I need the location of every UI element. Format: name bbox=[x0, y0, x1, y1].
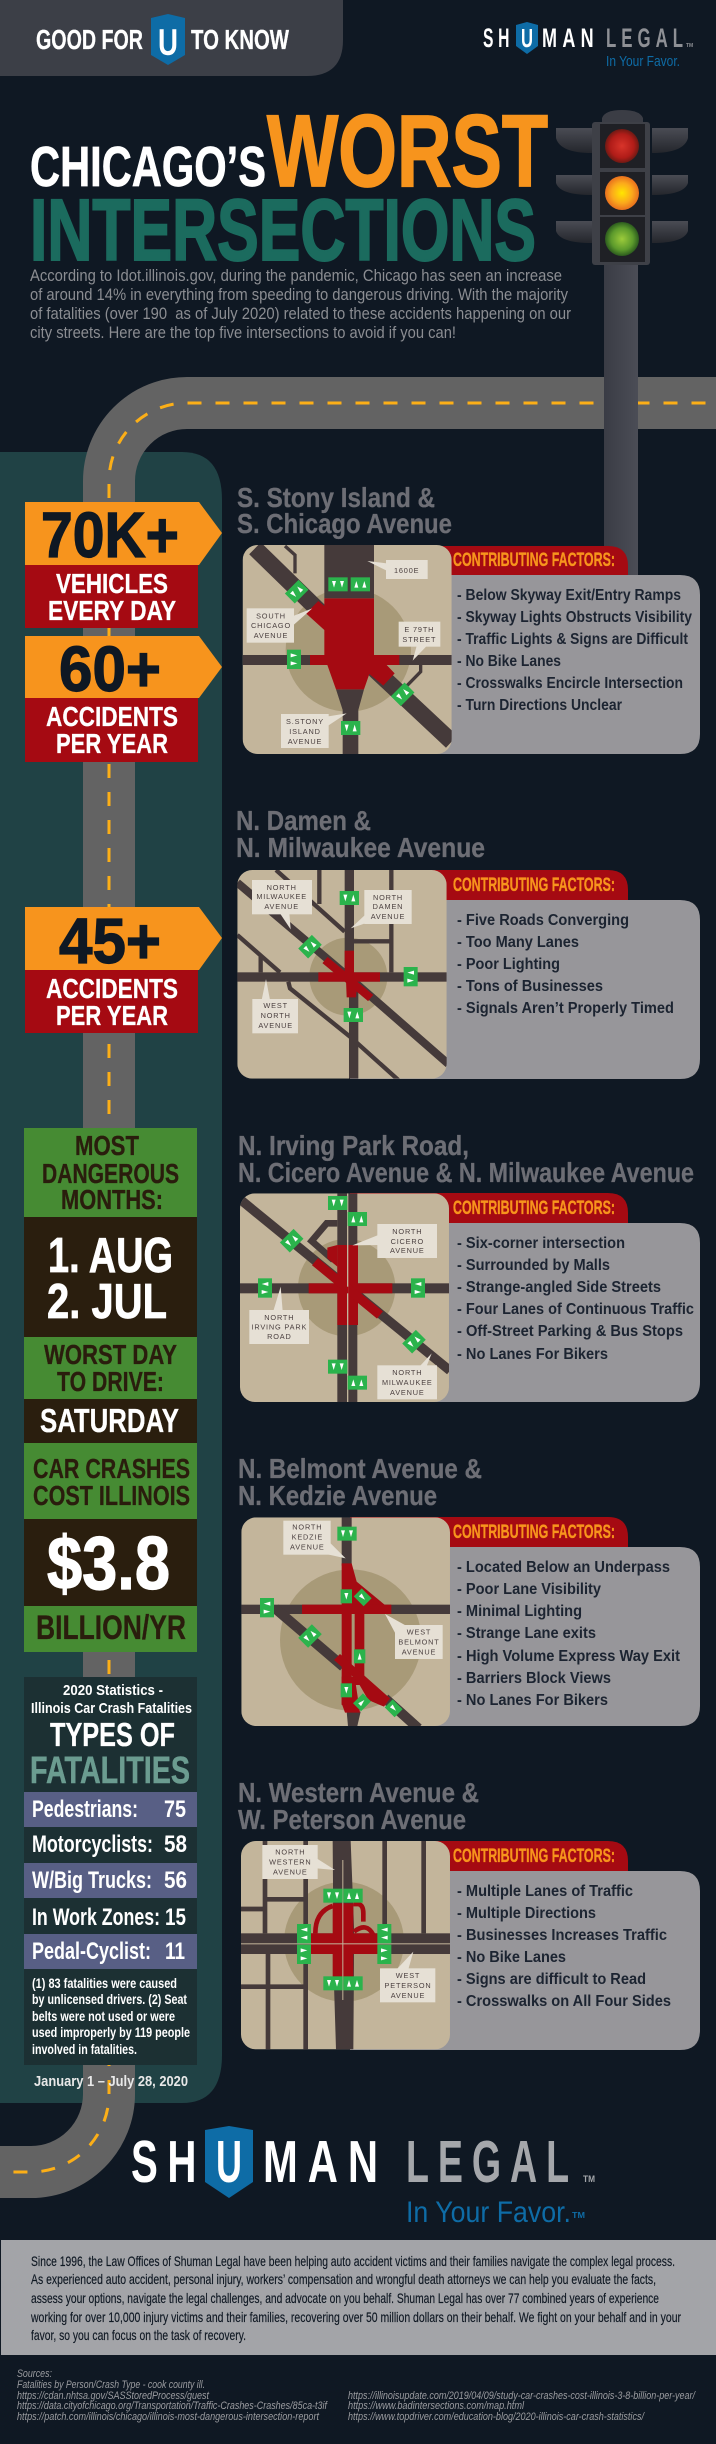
intersection 2: N. Damen & bbox=[236, 805, 371, 836]
map: Irving Park, Cicero and Milwaukee: IRVING PARK bbox=[251, 1323, 307, 1332]
types of fatalities table: 11 bbox=[165, 1938, 185, 1965]
map: Stony Island and Chicago: STREET bbox=[402, 635, 436, 644]
intersection 2: CONTRIBUTING FACTORS: bbox=[453, 875, 615, 896]
intersection 1: - No Bike Lanes bbox=[457, 653, 561, 670]
map: Stony Island and Chicago: E 79TH bbox=[404, 625, 434, 634]
sources: Fatalities by Person/Crash Type - cook county ill. bbox=[17, 2379, 205, 2391]
logo: Shuman Legal top: U bbox=[521, 23, 533, 53]
title bbox=[30, 94, 548, 279]
road bbox=[0, 403, 716, 2172]
map: Belmont and Kedzie: AVENUE bbox=[402, 1648, 436, 1657]
intersection 4: - High Volume Express Way Exit bbox=[457, 1648, 680, 1665]
map: Western and Peterson bbox=[241, 1841, 450, 2049]
logo: Shuman Legal top: TM bbox=[686, 43, 693, 49]
header tab: good for U to know: TO KNOW bbox=[191, 24, 289, 55]
map: Damen and Milwaukee: NORTH bbox=[373, 893, 403, 902]
intersection 1: CONTRIBUTING FACTORS: bbox=[453, 550, 615, 571]
logo: Shuman Legal footer bbox=[131, 2126, 595, 2229]
map: Irving Park, Cicero and Milwaukee: ROAD bbox=[267, 1332, 292, 1341]
intersection 5: CONTRIBUTING FACTORS: bbox=[453, 1846, 615, 1867]
intersection 4: - Barriers Block Views bbox=[457, 1670, 611, 1687]
about text block: favor, so you can focus on the task of recovery. bbox=[31, 2327, 246, 2343]
stat stack: most dangerous months: 2. JUL bbox=[47, 1275, 167, 1329]
intersection 4: - Minimal Lighting bbox=[457, 1603, 582, 1620]
intersection 4: - Located Below an Underpass bbox=[457, 1559, 670, 1576]
types of fatalities table: 56 bbox=[164, 1867, 187, 1894]
stat sign: 45+ accidents per year: 45+ bbox=[59, 905, 161, 977]
intersection 4 bbox=[238, 1453, 700, 1728]
stat stack: worst day to drive: WORST DAY bbox=[44, 1339, 177, 1370]
stat sign: 45+ accidents per year bbox=[25, 905, 222, 1033]
intersection 1: - Turn Directions Unclear bbox=[457, 697, 622, 714]
intersection 4: - Strange Lane exits bbox=[457, 1625, 596, 1642]
map: Damen and Milwaukee: AVENUE bbox=[258, 1021, 293, 1030]
intro text: of fatalities (over 190 as of July 2020) related to these accidents happening on our bbox=[30, 305, 571, 323]
map: Western and Peterson: AVENUE bbox=[273, 1868, 308, 1877]
logo: Shuman Legal top: SH bbox=[483, 23, 514, 53]
stat sign: 45+ accidents per year: PER YEAR bbox=[56, 1000, 168, 1031]
intersection 5: N. Western Avenue & bbox=[238, 1777, 479, 1808]
map: Stony Island and Chicago: AVENUE bbox=[254, 631, 288, 640]
map: Irving Park, Cicero and Milwaukee bbox=[240, 1193, 450, 1402]
teal side panel bbox=[0, 452, 222, 2103]
map: Western and Peterson: AVENUE bbox=[391, 1991, 425, 2000]
stat sign: 70K+ vehicles every day bbox=[25, 499, 222, 628]
types of fatalities table: Pedal-Cyclist: bbox=[32, 1938, 151, 1965]
map: Damen and Milwaukee: AVENUE bbox=[264, 902, 299, 911]
intersection 5 bbox=[238, 1777, 700, 2050]
logo: Shuman Legal footer: MAN bbox=[263, 2129, 388, 2195]
date range: January 1 – July 28, 2020 bbox=[34, 2073, 188, 2090]
stat sign: 70K+ vehicles every day: EVERY DAY bbox=[48, 595, 176, 626]
title: INTERSECTIONS bbox=[30, 182, 536, 279]
map: Western and Peterson: NORTH bbox=[275, 1848, 305, 1857]
about text block bbox=[1, 2240, 716, 2355]
types of fatalities table: 2020 Statistics - bbox=[63, 1682, 163, 1699]
logo: Shuman Legal footer: U bbox=[216, 2129, 242, 2195]
intersection 1: S. Stony Island & bbox=[237, 482, 435, 513]
map: Irving Park, Cicero and Milwaukee: AVENUE bbox=[390, 1388, 425, 1397]
intersection 5: - Businesses Increases Traffic bbox=[457, 1927, 667, 1944]
intersection 1: - Traffic Lights & Signs are Difficult bbox=[457, 631, 688, 648]
stat stack: cost of crashes: BILLION/YR bbox=[36, 1609, 186, 1647]
intersection 3: N. Irving Park Road, bbox=[238, 1130, 469, 1161]
intro text: city streets. Here are the top five intersections to avoid if you can! bbox=[30, 324, 456, 342]
title: CHICAGO’S bbox=[30, 135, 266, 199]
map: Stony Island and Chicago: ISLAND bbox=[289, 727, 321, 736]
intersection 2: - Poor Lighting bbox=[457, 956, 560, 973]
intersection 3: - Off-Street Parking & Bus Stops bbox=[457, 1323, 683, 1340]
stat stack: cost of crashes: COST ILLINOIS bbox=[33, 1480, 190, 1511]
map: Damen and Milwaukee: DAMEN bbox=[373, 902, 403, 911]
map: Belmont and Kedzie: AVENUE bbox=[290, 1543, 325, 1552]
intersection 2: N. Milwaukee Avenue bbox=[236, 832, 485, 863]
intersection 5: - No Bike Lanes bbox=[457, 1949, 566, 1966]
stat stack: most dangerous months: MOST bbox=[75, 1130, 139, 1161]
intersection 1: - Crosswalks Encircle Intersection bbox=[457, 675, 683, 692]
stat sign: 70K+ vehicles every day: VEHICLES bbox=[56, 568, 168, 599]
traffic light bbox=[556, 110, 688, 600]
stat stack: worst day to drive: TO DRIVE: bbox=[57, 1366, 164, 1397]
stat stack: most dangerous months: 1. AUG bbox=[48, 1229, 173, 1283]
intersection 4: CONTRIBUTING FACTORS: bbox=[453, 1522, 615, 1543]
header tab: good for U to know bbox=[0, 0, 343, 76]
map: Western and Peterson: WESTERN bbox=[269, 1858, 312, 1867]
stat sign: 45+ accidents per year: ACCIDENTS bbox=[46, 973, 178, 1004]
map: Stony Island and Chicago: AVENUE bbox=[288, 737, 322, 746]
sources: https://data.cityofchicago.org/Transportation/Traffic-Crashes-Crashes/85ca-t3if bbox=[17, 2400, 328, 2412]
map: Belmont and Kedzie: WEST bbox=[407, 1628, 431, 1637]
types of fatalities table: used improperly by 119 people bbox=[32, 2024, 190, 2040]
types of fatalities table: In Work Zones: bbox=[32, 1904, 160, 1931]
intersection 5: - Crosswalks on All Four Sides bbox=[457, 1993, 671, 2010]
stat sign: 60+ accidents per year bbox=[25, 633, 222, 762]
map: Western and Peterson: WEST bbox=[396, 1971, 420, 1980]
map: Damen and Milwaukee: WEST bbox=[263, 1001, 288, 1010]
map: Irving Park, Cicero and Milwaukee: NORTH bbox=[392, 1368, 422, 1377]
stat stack: cost of crashes: CAR CRASHES bbox=[33, 1453, 190, 1484]
logo: Shuman Legal footer: TM bbox=[583, 2174, 595, 2184]
types of fatalities table: TYPES OF bbox=[50, 1716, 175, 1753]
map: Belmont and Kedzie bbox=[241, 1517, 450, 1728]
intersection 5: - Signs are difficult to Read bbox=[457, 1971, 646, 1988]
types of fatalities table: involved in fatalities. bbox=[32, 2041, 137, 2057]
intro text: of around 14% in everything from speeding to dangerous driving. With the majority bbox=[30, 286, 569, 304]
map: Belmont and Kedzie: NORTH bbox=[292, 1523, 322, 1532]
intersection 2: - Tons of Businesses bbox=[457, 978, 603, 995]
header tab: good for U to know: GOOD FOR bbox=[36, 24, 143, 55]
sources: https://www.topdriver.com/education-blog/2020-illinois-car-crash-statistics/ bbox=[348, 2411, 645, 2423]
intersection 4: N. Belmont Avenue & bbox=[238, 1453, 482, 1484]
logo: Shuman Legal footer: TM bbox=[572, 2211, 585, 2220]
types of fatalities table: Pedestrians: bbox=[32, 1796, 138, 1823]
intersection 5: - Multiple Directions bbox=[457, 1905, 596, 1922]
map: Stony Island and Chicago: SOUTH bbox=[256, 612, 286, 621]
types of fatalities table: by unlicensed drivers. (2) Seat bbox=[32, 1991, 187, 2007]
header tab: good for U to know: U bbox=[158, 22, 178, 63]
stat sign: 60+ accidents per year: 60+ bbox=[59, 633, 161, 705]
map: Damen and Milwaukee: MILWAUKEE bbox=[256, 892, 307, 901]
types of fatalities table: (1) 83 fatalities were caused bbox=[32, 1975, 177, 1991]
intersection 3: CONTRIBUTING FACTORS: bbox=[453, 1198, 615, 1219]
map: Damen and Milwaukee: AVENUE bbox=[371, 912, 405, 921]
types of fatalities table: 15 bbox=[165, 1904, 186, 1931]
map: Irving Park, Cicero and Milwaukee: NORTH bbox=[264, 1313, 294, 1322]
stat sign: 70K+ vehicles every day: 70K+ bbox=[41, 499, 179, 571]
sources: https://patch.com/illinois/chicago/illinois-most-dangerous-intersection-report bbox=[17, 2411, 320, 2423]
map: Stony Island and Chicago: S.STONY bbox=[286, 717, 324, 726]
intersection 1: - Below Skyway Exit/Entry Ramps bbox=[457, 587, 681, 604]
intersection 3 bbox=[238, 1130, 700, 1402]
intersection 3: - Strange-angled Side Streets bbox=[457, 1279, 661, 1296]
intersection 1: - Skyway Lights Obstructs Visibility bbox=[457, 609, 692, 626]
stat sign: 60+ accidents per year: ACCIDENTS bbox=[46, 701, 178, 732]
title: WORST bbox=[267, 94, 548, 208]
intersection 1: S. Chicago Avenue bbox=[237, 508, 452, 539]
intersection 4: - No Lanes For Bikers bbox=[457, 1692, 608, 1709]
stat stack: most dangerous months: MONTHS: bbox=[61, 1184, 163, 1215]
stat sign: 60+ accidents per year: PER YEAR bbox=[56, 728, 168, 759]
logo: Shuman Legal top: MAN bbox=[542, 23, 599, 53]
types of fatalities table: FATALITIES bbox=[30, 1750, 190, 1792]
intersection 5: - Multiple Lanes of Traffic bbox=[457, 1883, 633, 1900]
intersection 2: - Five Roads Converging bbox=[457, 912, 629, 929]
types of fatalities table bbox=[24, 1677, 197, 2065]
map: Irving Park, Cicero and Milwaukee: MILWAUKEE bbox=[382, 1378, 433, 1387]
map: Stony Island and Chicago bbox=[243, 545, 452, 754]
map: Western and Peterson: PETERSON bbox=[385, 1981, 431, 1990]
stat stack: worst day to drive bbox=[24, 1337, 197, 1443]
map: Irving Park, Cicero and Milwaukee: NORTH bbox=[392, 1227, 422, 1236]
intersection 3: - No Lanes For Bikers bbox=[457, 1346, 608, 1363]
intersection 1 bbox=[237, 482, 700, 754]
logo: Shuman Legal footer: In Your Favor. bbox=[406, 2196, 571, 2229]
logo: Shuman Legal footer: SH bbox=[131, 2129, 206, 2195]
intersection 2 bbox=[236, 805, 700, 1080]
map: Damen and Milwaukee bbox=[237, 870, 448, 1080]
map: Belmont and Kedzie: BELMONT bbox=[398, 1638, 440, 1647]
stat stack: cost of crashes bbox=[24, 1443, 197, 1652]
intro text: According to Idot.illinois.gov, during the pandemic, Chicago has seen an increase bbox=[30, 267, 562, 285]
intersection 2: - Signals Aren’t Properly Timed bbox=[457, 1000, 674, 1017]
intersection 5: W. Peterson Avenue bbox=[238, 1804, 466, 1835]
intersection 4: N. Kedzie Avenue bbox=[238, 1480, 437, 1511]
stat stack: most dangerous months bbox=[24, 1128, 197, 1337]
logo: Shuman Legal top bbox=[483, 22, 693, 70]
intro text bbox=[30, 267, 571, 342]
types of fatalities table: W/Big Trucks: bbox=[32, 1867, 152, 1894]
intersection 2: - Too Many Lanes bbox=[457, 934, 579, 951]
types of fatalities table: 75 bbox=[164, 1796, 186, 1823]
map: Stony Island and Chicago: CHICAGO bbox=[251, 621, 291, 630]
sources: https://www.badintersections.com/map.html bbox=[348, 2400, 524, 2412]
stat stack: worst day to drive: SATURDAY bbox=[40, 1402, 179, 1439]
intersection 3: - Four Lanes of Continuous Traffic bbox=[457, 1301, 694, 1318]
map: Irving Park, Cicero and Milwaukee: CICERO bbox=[391, 1237, 424, 1246]
types of fatalities table: belts were not used or were bbox=[32, 2008, 175, 2024]
sources bbox=[17, 2368, 696, 2423]
intersection 4: - Poor Lane Visibility bbox=[457, 1581, 601, 1598]
logo: Shuman Legal footer: LEGAL bbox=[406, 2129, 578, 2195]
map: Stony Island and Chicago: 1600E bbox=[394, 566, 419, 575]
types of fatalities table: Motorcyclists: bbox=[32, 1831, 153, 1858]
types of fatalities table: 58 bbox=[164, 1831, 187, 1858]
types of fatalities table: Illinois Car Crash Fatalities bbox=[31, 1700, 192, 1717]
stat stack: cost of crashes: $3.8 bbox=[47, 1521, 170, 1605]
intersection 3: - Six-corner intersection bbox=[457, 1235, 625, 1252]
map: Belmont and Kedzie: KEDZIE bbox=[292, 1533, 323, 1542]
sources: https://cdan.nhtsa.gov/SASStoredProcess/guest bbox=[17, 2390, 210, 2402]
intersection 3: - Surrounded by Malls bbox=[457, 1257, 610, 1274]
stat stack: most dangerous months: DANGEROUS bbox=[42, 1158, 179, 1189]
sources: Sources: bbox=[17, 2368, 52, 2380]
map: Damen and Milwaukee: NORTH bbox=[261, 1011, 291, 1020]
map: Damen and Milwaukee: NORTH bbox=[267, 883, 297, 892]
logo: Shuman Legal top: In Your Favor. bbox=[606, 53, 680, 70]
map: Irving Park, Cicero and Milwaukee: AVENUE bbox=[390, 1246, 425, 1255]
